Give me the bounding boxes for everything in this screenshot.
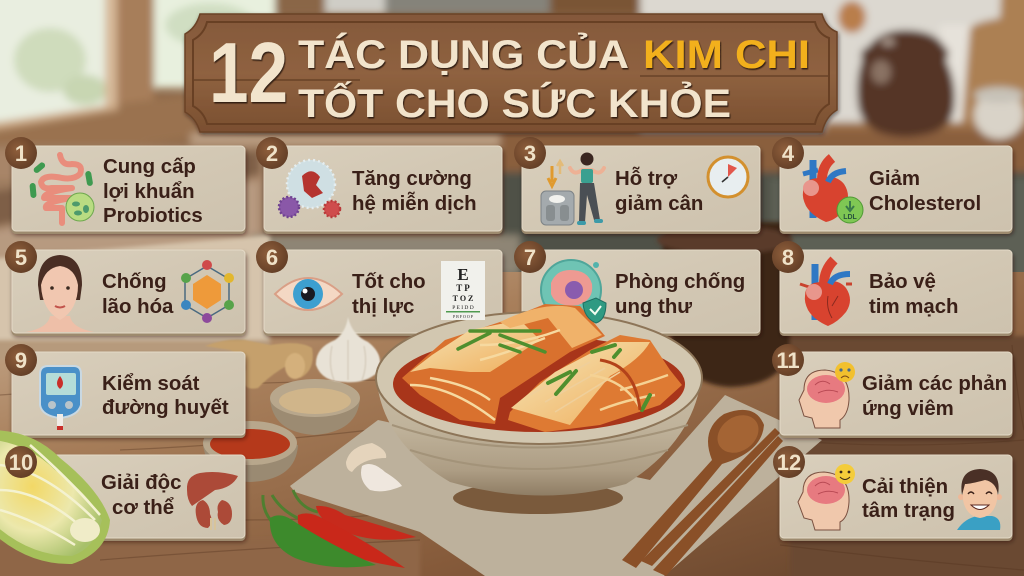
icon: glucose meter [40, 366, 81, 430]
card surface [780, 250, 1012, 333]
badge 5 [5, 241, 37, 273]
icon: eye chart: T P [456, 283, 470, 293]
title line 2: TỐT CHO SỨC KHỎE [298, 80, 731, 126]
badge 1 [5, 137, 37, 169]
badge 3 [514, 137, 546, 169]
icon: garlic bulb [316, 317, 380, 382]
label: tâm trạng [862, 500, 955, 522]
label: thị lực [352, 296, 414, 318]
badge 3: 3 [524, 141, 536, 166]
badge 4: 4 [782, 141, 795, 166]
badge 1: 1 [15, 141, 27, 166]
card surface [780, 352, 1012, 435]
icon: sad emoji [835, 362, 855, 382]
title line 1: TÁC DỤNG CỦA [298, 31, 629, 77]
label: Giảm [869, 168, 920, 190]
panel: card 2 immune system [264, 146, 502, 231]
badge 8: 8 [782, 245, 794, 270]
badge 6 [256, 241, 288, 273]
icon: sesame bowl [270, 379, 360, 435]
plaque body [185, 14, 837, 132]
bowl rim [376, 312, 702, 444]
label: Cholesterol [869, 193, 981, 215]
badge 2: 2 [266, 141, 278, 166]
card surface [12, 146, 245, 231]
label: giảm cân [615, 193, 703, 215]
label: Bảo vệ [869, 271, 936, 293]
icon: woman face [26, 255, 94, 332]
title highlight KIM CHI: KIM CHI [643, 33, 810, 77]
kimchi roll right [508, 335, 682, 432]
label: Tăng cường [352, 168, 472, 190]
label: cơ thể [112, 497, 174, 519]
label: ứng viêm [862, 398, 954, 420]
panel: card 3 weight loss [522, 146, 760, 231]
title number 12: 12 [209, 26, 288, 121]
badge 12: 12 [777, 450, 801, 475]
icon: wooden spoon [622, 407, 766, 568]
card surface [522, 146, 760, 231]
label: Phòng chống [615, 271, 745, 293]
icon: shield [583, 298, 606, 323]
panel: card 10 detox [40, 455, 245, 538]
icon: liver and kidneys [187, 472, 238, 530]
label: đường huyết [102, 397, 229, 419]
badge 7 [514, 241, 546, 273]
label: ung thư [615, 296, 692, 318]
kimchi roll left [402, 304, 605, 424]
label: Cung cấp [103, 156, 196, 178]
icon: head with brain [798, 472, 849, 530]
label: Giải độc [101, 472, 181, 494]
badge 10 [5, 446, 37, 478]
icon: scale and woman [541, 152, 604, 225]
label: Kiểm soát [102, 373, 200, 395]
label: Chống [102, 271, 167, 293]
icon: heart [800, 260, 852, 326]
icon: eye chart [441, 261, 485, 320]
label: Tốt cho [352, 271, 426, 293]
plaque: title board [185, 14, 837, 132]
panel: card 8 heart protection [780, 250, 1012, 333]
icon: napa cabbage [0, 430, 110, 564]
panel: card 7 cancer prevention [522, 250, 760, 333]
badge 4 [772, 137, 804, 169]
icon: heart with LDL [803, 158, 863, 223]
cloth napkin [290, 395, 822, 576]
icon: eye chart: T O Z [453, 294, 473, 303]
badge 7: 7 [524, 245, 536, 270]
panel: card 9 blood sugar [12, 352, 245, 435]
label: lợi khuẩn [103, 181, 195, 203]
bowl foot [453, 482, 623, 514]
card surface [12, 250, 245, 333]
icon: heart with LDL: LDL [843, 214, 858, 221]
icon: protected cell [541, 260, 601, 320]
icon: ginger [205, 340, 313, 389]
panel: card 1 probiotics [12, 146, 245, 231]
icon: clock [708, 157, 748, 197]
panel: card 4 cholesterol [780, 146, 1012, 231]
card surface [264, 146, 502, 231]
icon: kimchi bowl [376, 304, 702, 514]
badge 8 [772, 241, 804, 273]
badge 11 [772, 344, 804, 376]
icon: eye chart: P E I D D [452, 305, 474, 311]
label: Cải thiện [862, 476, 948, 498]
icon: smile emoji [835, 464, 855, 484]
badge 9 [5, 344, 37, 376]
icon: eye [275, 278, 342, 310]
soup [393, 336, 685, 432]
icon: eye chart: P B F O O P [453, 314, 474, 319]
card surface [522, 250, 760, 333]
icon: chili peppers [263, 490, 416, 568]
panel: card 6 eyesight [264, 250, 502, 333]
label: Hỗ trợ [615, 166, 678, 190]
icon: smiling man [957, 469, 1002, 530]
label: Giảm các phản [862, 373, 1007, 395]
icon: eye chart: E [457, 265, 469, 284]
icon: gut and bacteria [29, 155, 94, 223]
badge 11: 11 [776, 348, 800, 373]
card surface [40, 455, 245, 538]
label: hệ miễn dịch [352, 191, 477, 215]
card surface [780, 455, 1012, 538]
icon: chopsticks [641, 428, 783, 576]
card surface [12, 352, 245, 435]
icon: head with brain [799, 370, 849, 428]
label: lão hóa [102, 296, 174, 318]
icon: molecule [181, 260, 234, 323]
icon: garlic cloves [346, 443, 402, 491]
badge 2 [256, 137, 288, 169]
badge 12 [773, 446, 805, 478]
icon: immune cells [279, 160, 340, 217]
panel: card 11 inflammation [780, 352, 1012, 435]
badge 10: 10 [9, 450, 33, 475]
label: Probiotics [103, 205, 203, 227]
label: tim mạch [869, 296, 959, 318]
icon: chili powder bowl [203, 421, 298, 482]
badge 6: 6 [266, 245, 278, 270]
card surface [264, 250, 502, 333]
badge 9: 9 [15, 348, 27, 373]
panel: card 5 anti-aging [12, 250, 245, 333]
panel: card 12 mood [780, 455, 1012, 538]
badge 5: 5 [15, 245, 27, 270]
bowl body [376, 370, 702, 496]
card surface [780, 146, 1012, 231]
